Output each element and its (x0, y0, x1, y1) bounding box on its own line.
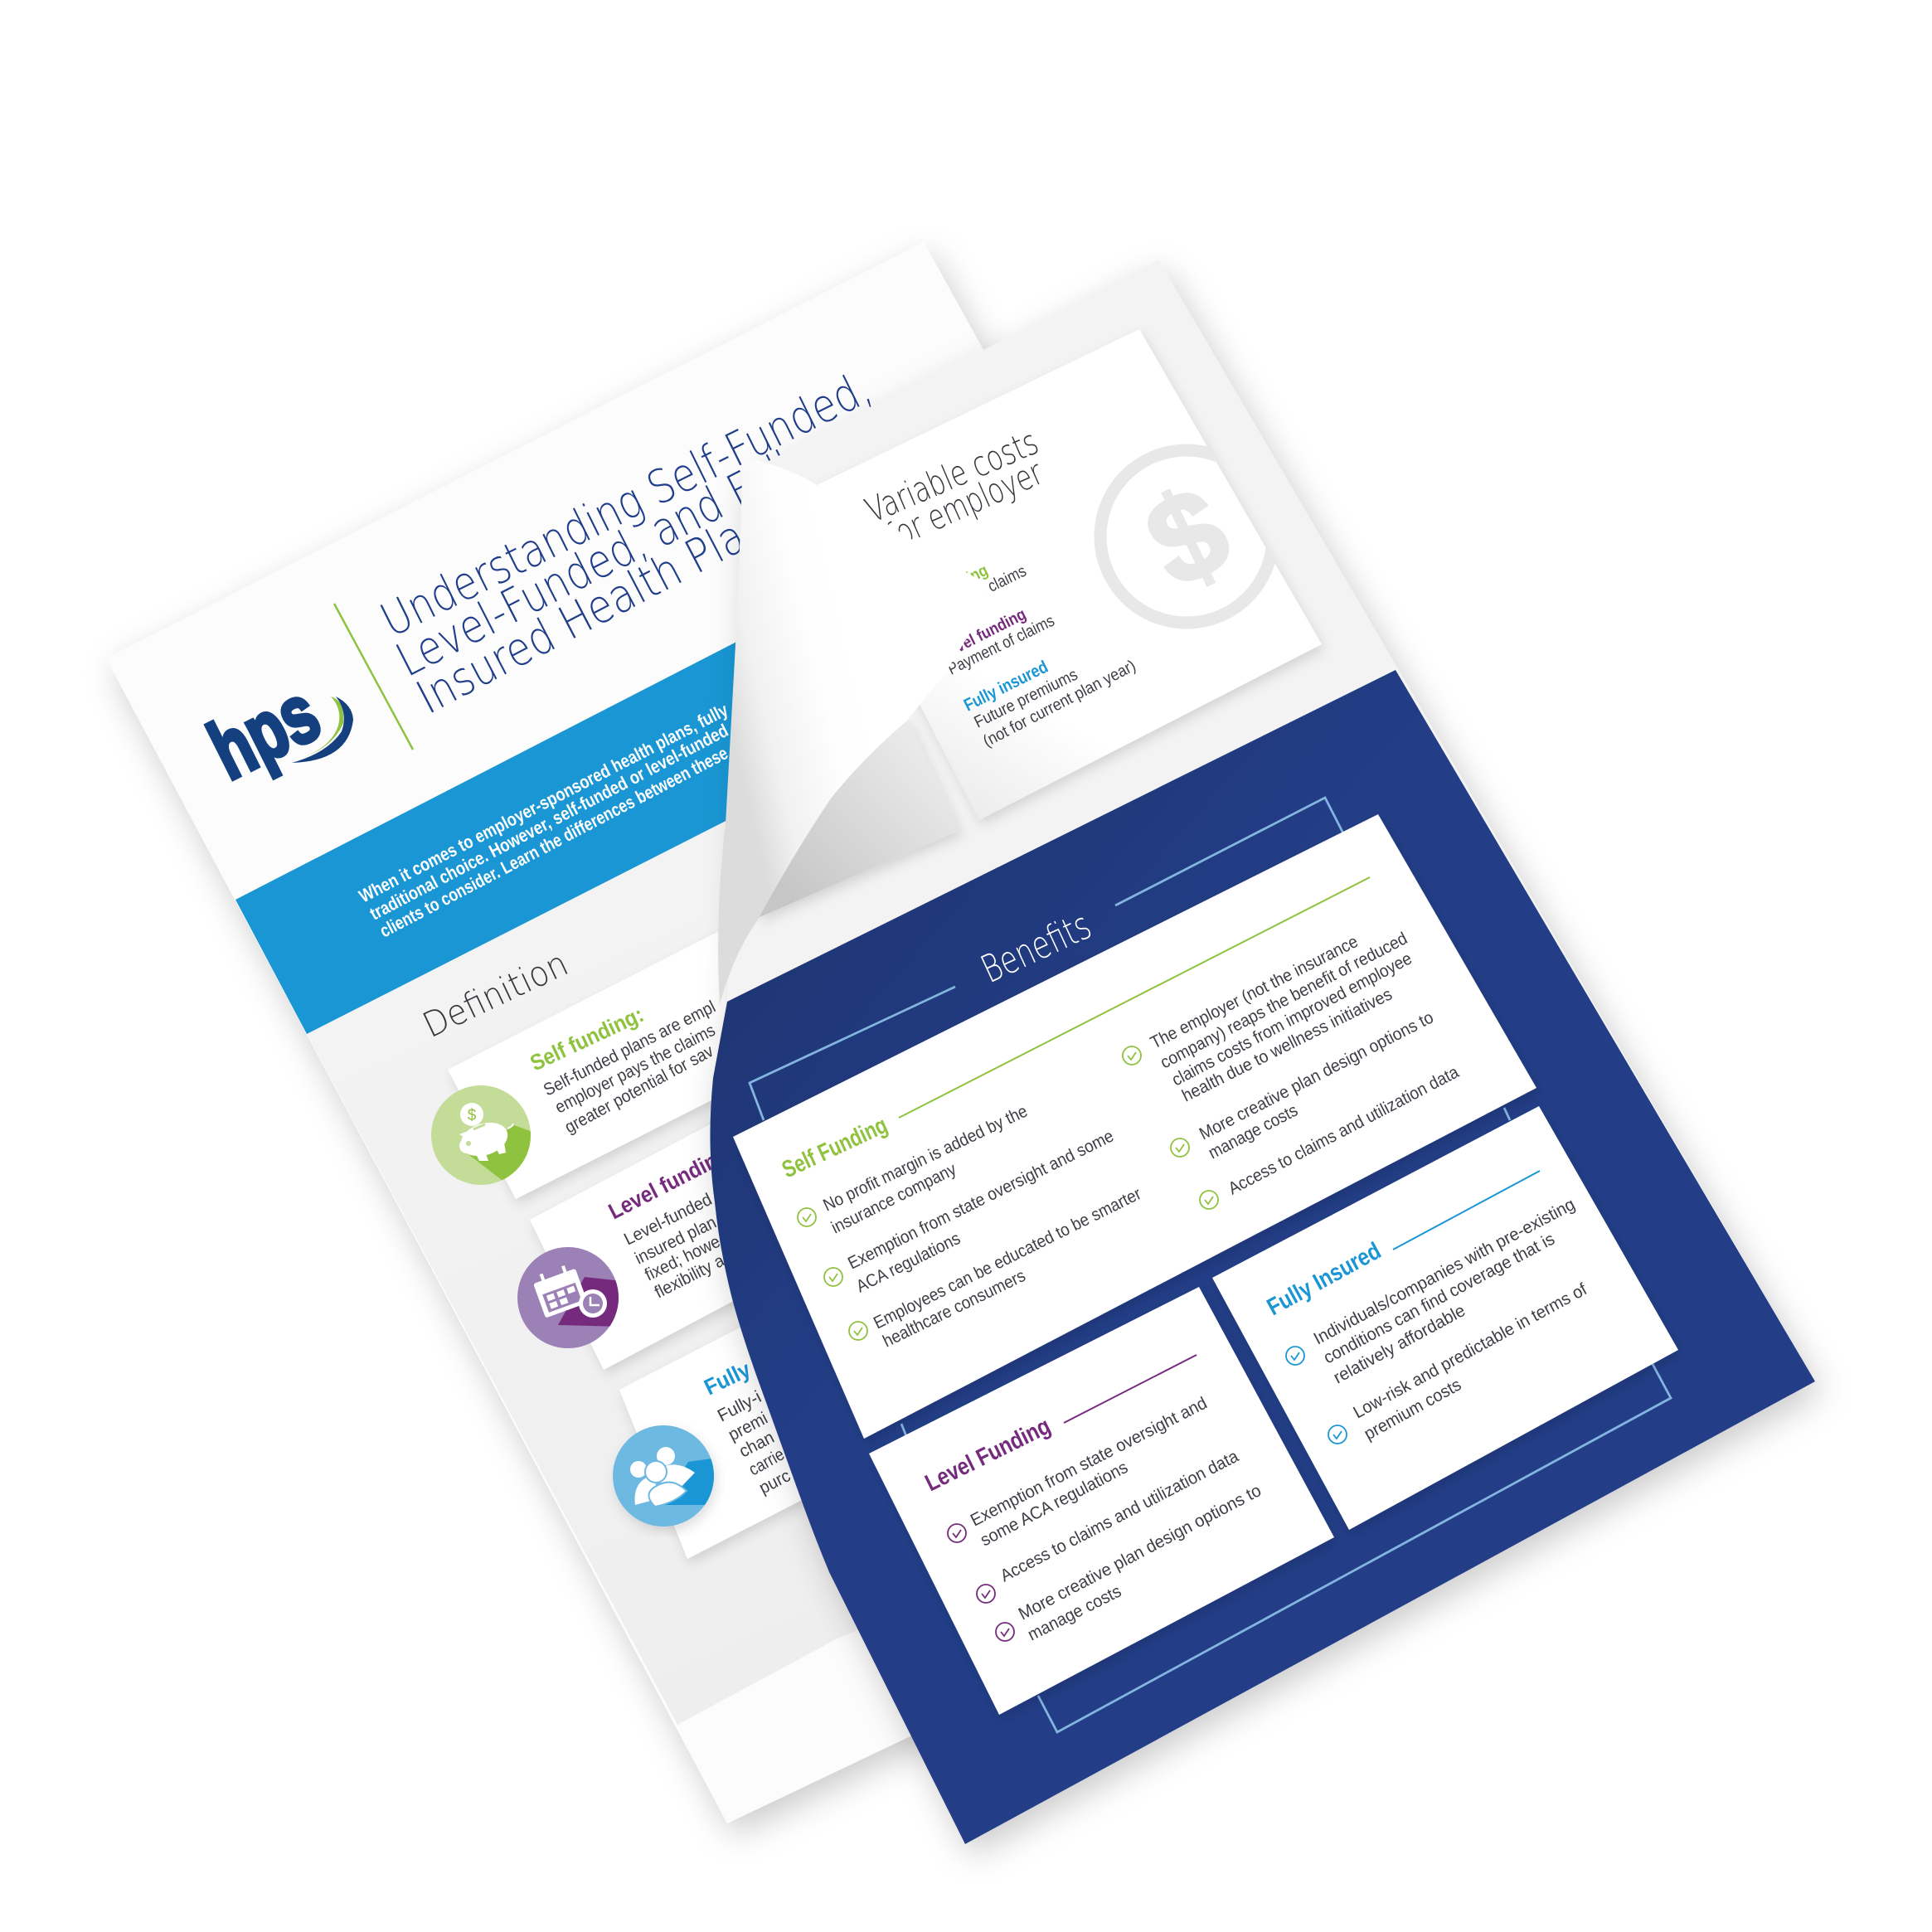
intro text: clients to consider. Learn the differences between these (376, 743, 731, 941)
panel: self funding benefits: More creative plan design options to (1197, 1007, 1437, 1143)
panel: self funding benefits: ACA regulations (853, 1229, 964, 1296)
green check icons (798, 1046, 1218, 1340)
card: fully insured: carrie (745, 1444, 788, 1479)
card: fully insured: premi (726, 1409, 771, 1444)
panel: variable costs: (not for current plan year) (980, 657, 1138, 750)
intro text: When it comes to employer-sponsored health plans, fully (356, 699, 731, 906)
panel: variable costs: Payment of claims (945, 612, 1057, 679)
panel: variable costs: Future premiums (971, 666, 1080, 731)
panel: self funding benefits: Employees can be educated to be smarter (871, 1184, 1144, 1332)
panel: fully insured benefits: Fully Insured (1263, 1238, 1386, 1321)
card: level funding: insured plan (632, 1213, 720, 1269)
panel: variable costs: Payment of claims (917, 562, 1029, 629)
panel: level funding benefits: manage costs (1025, 1581, 1124, 1644)
grey body of back page (307, 630, 1493, 1725)
panel: self funding benefits: company) reaps the benefit of reduced (1158, 929, 1410, 1072)
panel: self funding benefits: No profit margin is added by the (820, 1102, 1031, 1216)
panel: variable costs: Level funding (937, 605, 1029, 663)
icon: group of people (613, 1425, 717, 1527)
icon: dollar (1100, 450, 1273, 623)
card: self funding: Self funding: (527, 1002, 648, 1075)
panel: level funding benefits: Exemption from state oversight and (968, 1394, 1210, 1530)
panel: variable costs: for employer (881, 452, 1049, 556)
page curl (718, 458, 989, 1004)
panel: fully insured benefits (1212, 1106, 1678, 1530)
title: Understanding Self-Funded, (372, 361, 880, 648)
panel: self funding benefits: insurance company (828, 1159, 959, 1237)
panel: variable costs: Variable costs (860, 421, 1044, 531)
panel: self funding benefits: The employer (not the insurance (1148, 932, 1362, 1052)
icon: calendar and clock (517, 1247, 622, 1348)
curl shadow (758, 718, 960, 918)
icon: dollar: $ (1126, 459, 1249, 614)
panel: variable costs: Self funding (909, 561, 991, 614)
panel: fully insured benefits: Individuals/companies with pre-existing (1311, 1195, 1578, 1348)
navy lower section (710, 670, 1815, 1844)
panel: fully insured benefits: premium costs (1361, 1375, 1464, 1444)
panel: self funding benefits (733, 814, 1536, 1439)
panel: self funding benefits: claims costs from improved employee (1169, 949, 1415, 1090)
hps logo: hps (196, 666, 333, 798)
front page (710, 260, 1815, 1844)
panel: self funding benefits: manage costs (1206, 1101, 1301, 1163)
card: level funding: Level funding (604, 1143, 732, 1224)
card: fully insured: Fully-i (715, 1387, 765, 1425)
panel: level funding benefits: Level Funding (921, 1413, 1055, 1497)
panel: fully insured benefits: relatively affordable (1330, 1301, 1468, 1387)
icon: piggy bank: $ (468, 1107, 477, 1124)
card: self funding: greater potential for sav (561, 1041, 717, 1137)
panel: fully insured benefits: Low-risk and predictable in terms of (1350, 1279, 1590, 1422)
panel: self funding benefits: healthcare consumers (880, 1266, 1028, 1352)
card: level funding: Level-funded (621, 1190, 715, 1249)
panel: self funding benefits: Exemption from state oversight and some (845, 1127, 1117, 1273)
panel: self funding benefits: health due to wellness initiatives (1179, 985, 1396, 1105)
purple check icons (948, 1524, 1014, 1641)
card: level funding (530, 1061, 904, 1370)
card: self funding (448, 875, 904, 1199)
intro text: traditional choice. However, self-funded or level-funded (366, 720, 731, 924)
blue intro band (235, 551, 987, 1034)
card: fully insured: purc (756, 1466, 794, 1498)
card: fully insured: Fully (701, 1357, 755, 1400)
card: self funding: employer pays the claims (552, 1021, 718, 1117)
panel: level funding benefits: some ACA regulations (978, 1458, 1131, 1550)
blue check icons (1286, 1347, 1347, 1444)
panel: level funding benefits (869, 1287, 1334, 1715)
title: Insured Health Plans (408, 488, 794, 725)
panel: fully insured benefits: conditions can find coverage that is (1321, 1230, 1558, 1367)
benefits heading: Benefits (974, 903, 1098, 992)
panel: self funding benefits: Self Funding (778, 1112, 891, 1183)
logo divider (334, 604, 413, 750)
icon: piggy bank (431, 1085, 531, 1185)
card: level funding: fixed; howe (642, 1232, 723, 1284)
benefits frame (750, 798, 1671, 1732)
panel: variable costs: Fully insured (961, 658, 1051, 715)
panel: level funding benefits: Access to claims and utilization data (998, 1447, 1242, 1585)
definition heading: Definition (416, 943, 574, 1046)
back page (106, 247, 997, 1842)
card: self funding: Self-funded plans are empl (541, 998, 719, 1099)
panel: level funding benefits: More creative plan design options to (1016, 1481, 1265, 1624)
card: fully insured (619, 1260, 945, 1559)
panel: variable costs (808, 329, 1322, 820)
card: fully insured: chan (736, 1428, 777, 1461)
title: Level-Funded, and Fully (388, 430, 823, 687)
panel: self funding benefits: Access to claims and utilization data (1226, 1062, 1462, 1198)
card: level funding: flexibility a (652, 1251, 728, 1302)
